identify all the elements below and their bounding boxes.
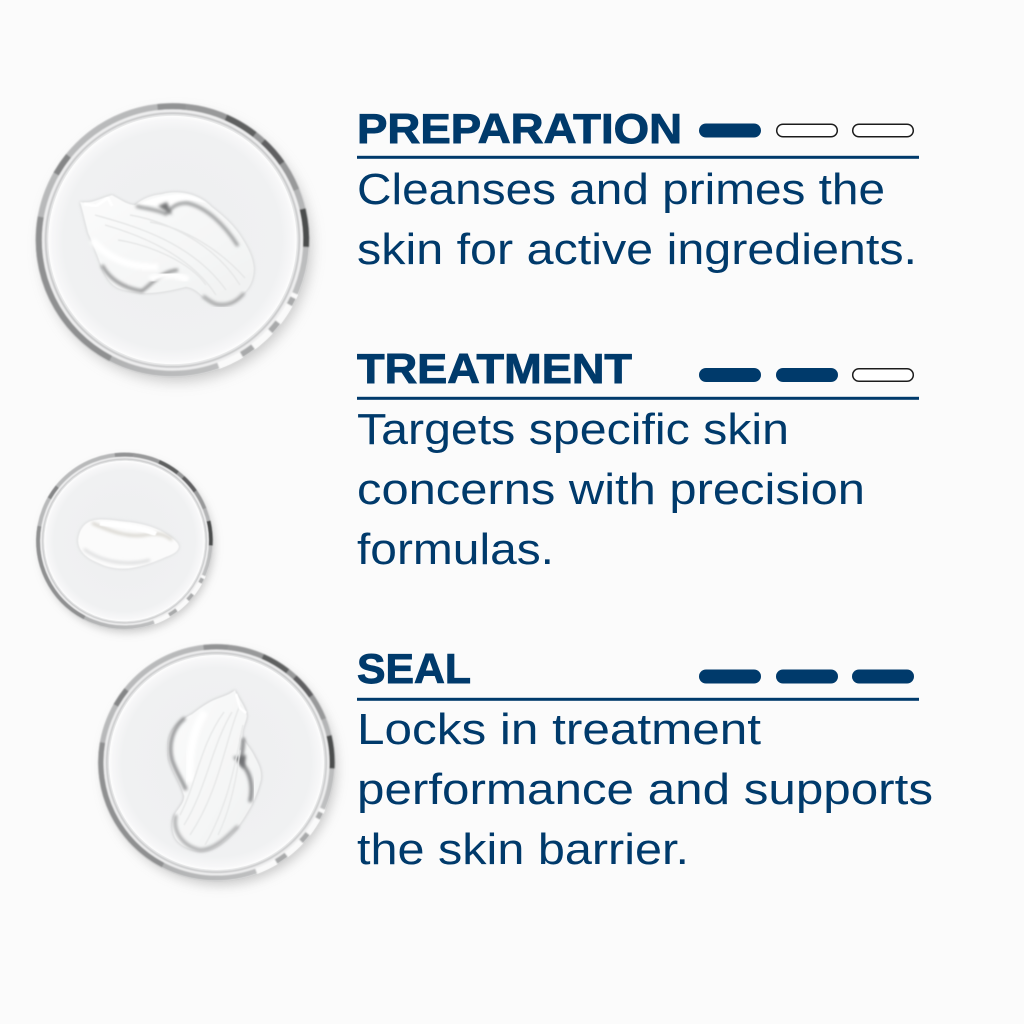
progress pills: step 2 of 3 [699,368,913,382]
description: preparation: skin for active ingredients. [357,225,917,274]
section: treatment [357,345,919,574]
heading: seal: SEAL [357,645,471,692]
dish: seal cream sample [53,599,380,926]
heading: preparation: PREPARATION [357,105,682,152]
cream smear: seal [168,690,261,851]
dish: treatment cream sample [2,419,247,663]
cream smear: preparation [80,192,254,305]
description: seal: Locks in treatment [357,705,761,754]
section: preparation [357,105,919,274]
dish: preparation cream sample [0,51,361,429]
section: seal [357,645,945,874]
heading: treatment: TREATMENT [357,345,632,392]
description: treatment: formulas. [357,525,554,574]
description: preparation: Cleanses and primes the [357,165,885,214]
progress pills: step 3 of 3 [699,670,914,684]
progress pills: step 1 of 3 [699,124,913,138]
description: seal: the skin barrier. [357,825,689,874]
description: treatment: Targets specific skin [357,405,789,454]
description: treatment: concerns with precision [357,465,865,514]
description: seal: performance and supports [357,765,933,814]
cream smear: treatment [78,519,179,569]
